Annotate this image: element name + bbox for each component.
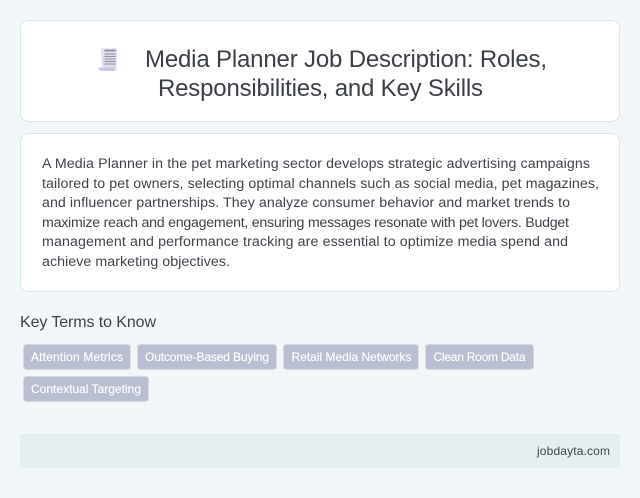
description text: management and performance tracking are essential to optimize media spend and [42, 234, 568, 250]
chip: contextual targeting: Contextual Targeting [31, 382, 141, 396]
description text: achieve marketing objectives. [42, 254, 230, 270]
title: Responsibilities, and Key Skills [158, 75, 483, 102]
panel: title card [20, 20, 620, 122]
chip: outcome-based buying: Outcome-Based Buying [145, 350, 269, 364]
chip: outcome-based buying [138, 344, 276, 370]
footer [20, 434, 620, 468]
description text: A Media Planner in the pet marketing sector develops strategic advertising campaigns [42, 156, 590, 172]
icon: document scroll [98, 48, 117, 71]
chip: clean room data: Clean Room Data [434, 350, 526, 364]
title [145, 46, 547, 102]
chip: clean room data [426, 344, 534, 370]
chip: retail media networks: Retail Media Networks [292, 350, 412, 364]
chip: attention metrics: Attention Metrics [31, 350, 123, 364]
description text: maximize reach and engagement, ensuring messages resonate with pet lovers. Budget [42, 215, 569, 231]
description text [42, 156, 599, 270]
key term chips [24, 344, 534, 402]
footer source: jobdayta.com [536, 444, 610, 458]
chip: attention metrics [24, 344, 130, 370]
description text: tailored to pet owners, selecting optimal channels such as social media, pet magazines, [42, 176, 599, 192]
heading: key terms: Key Terms to Know [20, 314, 156, 331]
panel: description [20, 134, 620, 292]
chip: contextual targeting [24, 376, 148, 402]
title: Media Planner Job Description: Roles, [145, 46, 547, 73]
description text: and influencer partnerships. They analyze consumer behavior and market trends to [42, 195, 570, 211]
chip: retail media networks [284, 344, 418, 370]
